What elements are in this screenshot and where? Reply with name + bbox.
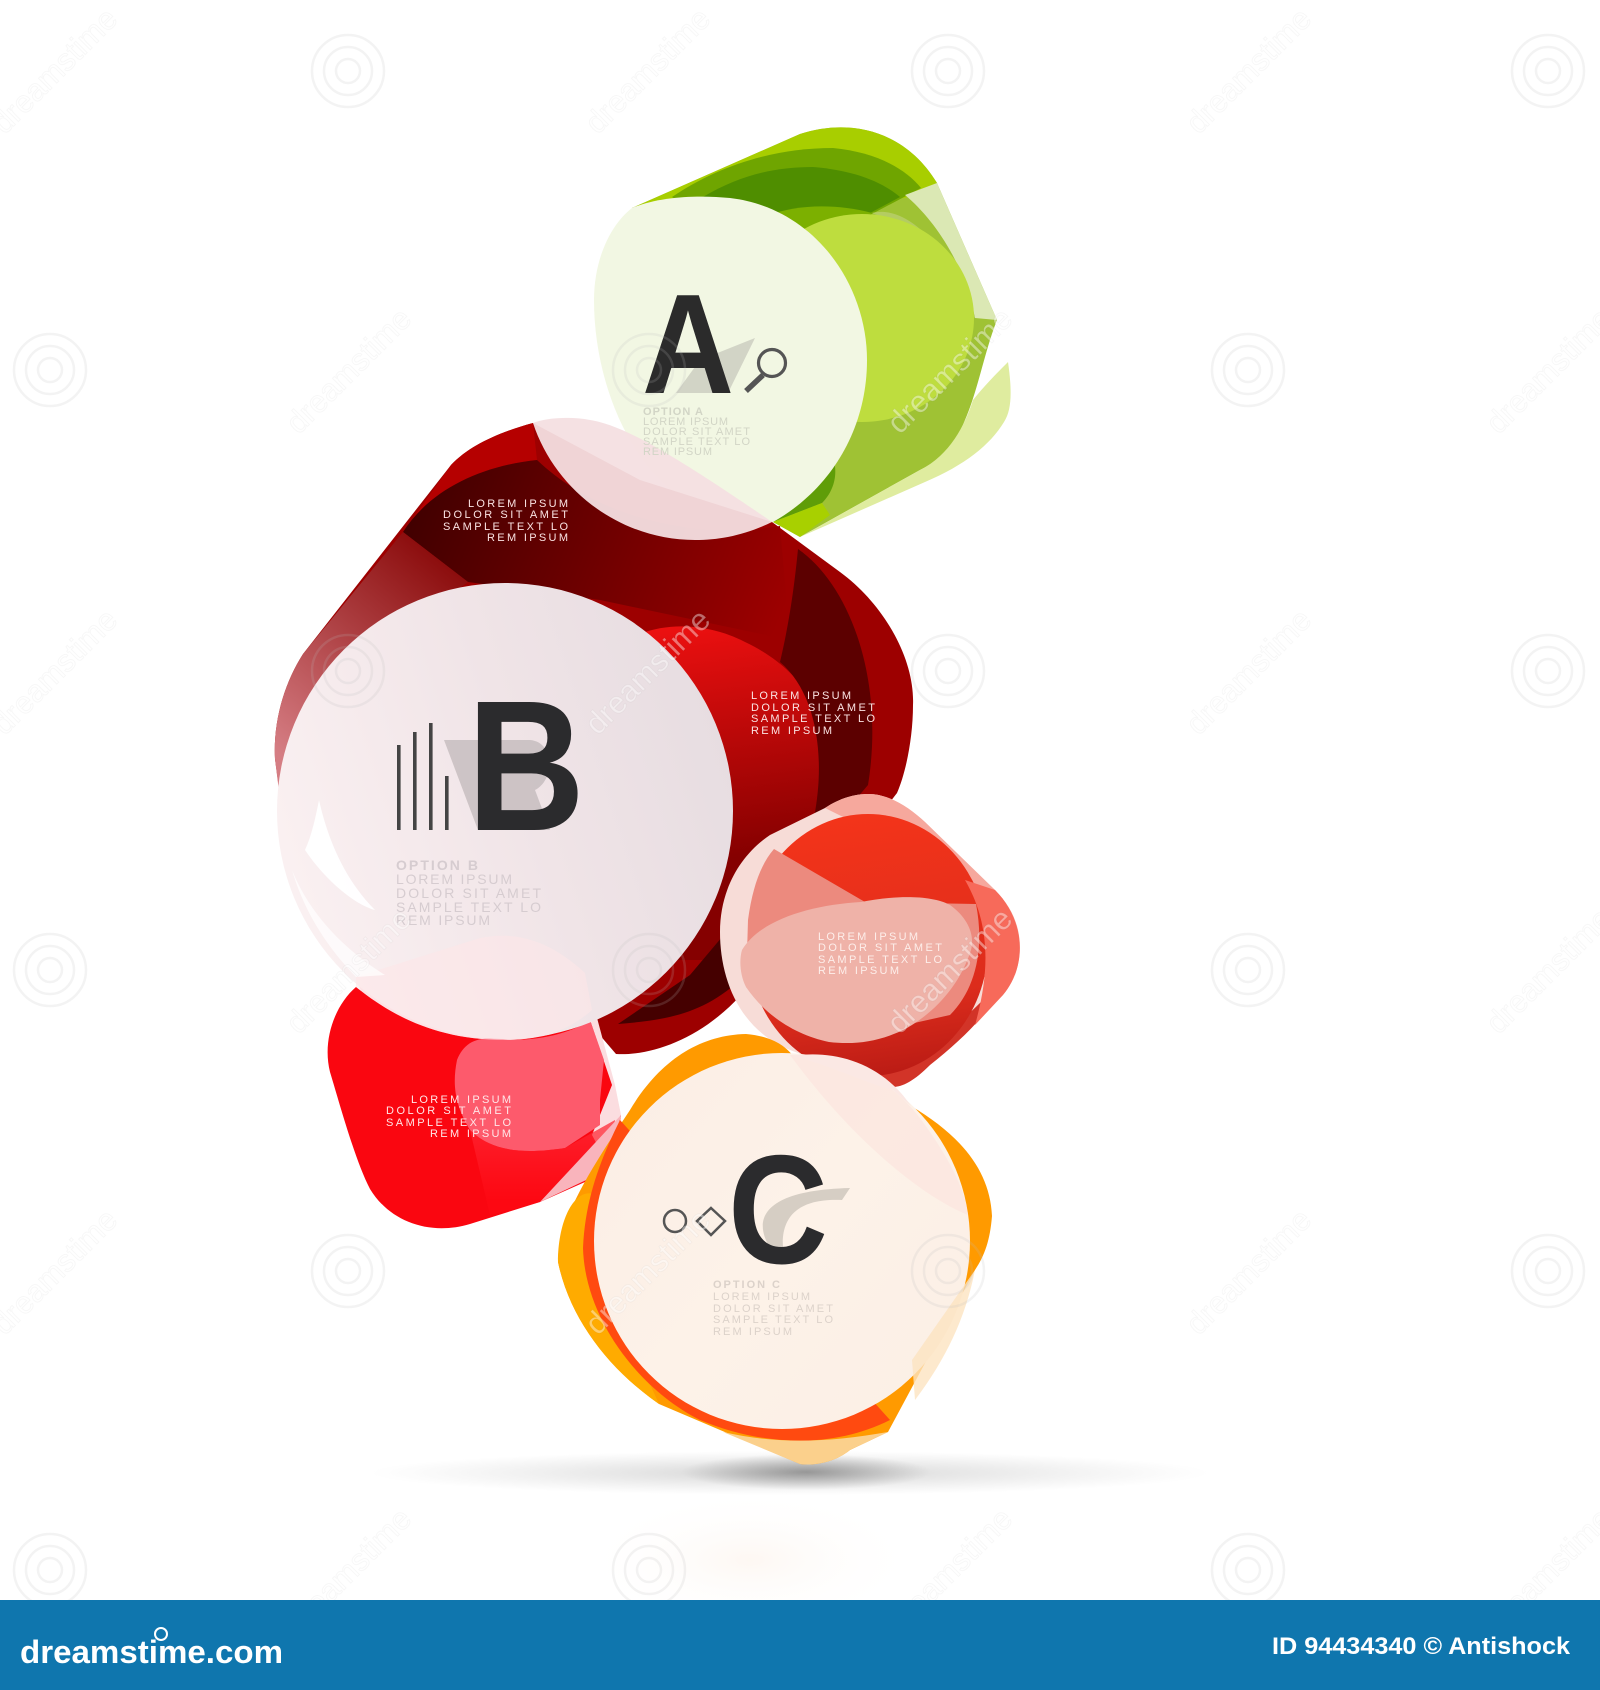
red body — [328, 987, 621, 1228]
panel: option A green shape — [632, 127, 1011, 537]
lower dark shadow band — [618, 808, 835, 1024]
text: option A: OPTION A — [643, 406, 703, 418]
watermark text: dreamstime — [1179, 602, 1318, 741]
left light strip — [275, 532, 468, 840]
pale diamond overlap on orange — [793, 1054, 911, 1106]
text: dark red right block: SAMPLE TEXT LO — [751, 713, 875, 725]
text: option A: REM IPSUM — [643, 446, 712, 458]
letter C — [728, 1123, 850, 1296]
pink circle — [455, 1020, 604, 1151]
rose wedge — [746, 849, 979, 1042]
text: diamond block: SAMPLE TEXT LO — [818, 954, 942, 966]
text: pink red block: DOLOR SIT AMET — [386, 1105, 511, 1117]
B ghost shadow — [444, 740, 550, 830]
text: pink red block: LOREM IPSUM — [411, 1094, 511, 1106]
text: dark red top block: LOREM IPSUM — [468, 498, 568, 510]
text: diamond block: DOLOR SIT AMET — [818, 942, 942, 954]
text: option C: LOREM IPSUM — [713, 1291, 810, 1303]
watermark text: dreamstime — [578, 602, 717, 741]
circle C — [594, 1053, 970, 1429]
watermark text: dreamstime — [880, 1501, 1019, 1640]
rose lower — [470, 1120, 615, 1215]
watermark text: dreamstime — [880, 901, 1019, 1040]
translucent overlays on circle B — [292, 800, 592, 1040]
salmon top right — [825, 794, 1020, 975]
text: option A: DOLOR SIT AMET — [643, 426, 750, 438]
pale lower left tint — [292, 870, 385, 977]
green translucent leaf — [800, 362, 1011, 537]
text: diamond block: REM IPSUM — [818, 965, 899, 977]
text: option C: DOLOR SIT AMET — [713, 1303, 833, 1315]
text: dark red right block — [751, 690, 875, 737]
pink tint upper right of C — [790, 1055, 968, 1215]
footer logo: dreamstime.com — [20, 1634, 283, 1670]
text: option C — [713, 1279, 833, 1338]
red base — [275, 423, 913, 1054]
watermark text: dreamstime — [279, 901, 418, 1040]
green body — [632, 127, 997, 537]
pink translucent overlay on top of red — [533, 418, 772, 540]
lime sliver — [773, 503, 830, 537]
green bump — [770, 206, 872, 250]
watermark text: dreamstime — [578, 1, 717, 140]
text: option C: OPTION C — [713, 1279, 780, 1291]
darker lower wedge — [773, 450, 835, 522]
green mid band — [872, 212, 975, 318]
C glyph: C — [728, 1123, 828, 1296]
red inner — [748, 814, 988, 1076]
text: option A — [643, 406, 750, 458]
circle B — [277, 583, 733, 1039]
dark gradient band — [403, 460, 790, 640]
C ghost shadow — [763, 1188, 850, 1262]
watermark text: dreamstime — [1179, 1202, 1318, 1341]
text: option A: SAMPLE TEXT LO — [643, 436, 750, 448]
panel: red B shape — [275, 423, 913, 1054]
watermark text: dreamstime — [279, 301, 418, 440]
circle A — [594, 197, 867, 527]
watermark text: dreamstime — [880, 301, 1019, 440]
text: pink red block — [386, 1094, 511, 1140]
panel: orange C shape — [558, 1034, 992, 1464]
panel: light red rounded diamond — [720, 794, 1020, 1087]
lower shape overlay — [356, 936, 592, 1040]
letter A — [642, 265, 755, 424]
text: dark red right block: DOLOR SIT AMET — [751, 702, 875, 714]
A glyph: A — [642, 265, 734, 424]
lime top band — [632, 127, 937, 208]
pink side — [965, 880, 1020, 1025]
pale right band — [905, 183, 997, 320]
dark green arc — [703, 167, 900, 240]
text: option B: OPTION B — [396, 857, 478, 873]
icon: circle and diamond — [664, 1208, 725, 1235]
text: pink red block: SAMPLE TEXT LO — [386, 1117, 511, 1129]
watermark text: dreamstime — [1179, 1, 1318, 140]
yellow orange left — [558, 1193, 659, 1404]
text: option C: REM IPSUM — [713, 1326, 792, 1338]
A ghost shadow — [676, 338, 755, 393]
text: option C: SAMPLE TEXT LO — [713, 1314, 833, 1326]
text: pink red block: REM IPSUM — [430, 1128, 511, 1140]
text: option A: LOREM IPSUM — [643, 416, 728, 428]
B glyph: B — [467, 663, 585, 870]
letter B — [444, 663, 585, 870]
text: option B: DOLOR SIT AMET — [396, 885, 541, 901]
text: dark red top block — [443, 498, 568, 544]
red orange crescent — [583, 1120, 890, 1441]
pale tip bottom right of C — [912, 1270, 975, 1400]
text: option B: REM IPSUM — [396, 912, 490, 928]
text: dark red right block: REM IPSUM — [751, 725, 832, 737]
text: option B — [396, 857, 541, 928]
pale top of shape — [356, 936, 621, 1202]
watermark text: dreamstime — [279, 1501, 418, 1640]
footer band — [0, 1600, 1600, 1690]
pale outer — [720, 794, 1020, 1087]
tan bottom — [723, 1432, 888, 1464]
icon: bars — [397, 723, 449, 830]
pale translucent tips — [540, 1115, 621, 1202]
icon: magnifier — [746, 350, 786, 391]
text: dark red top block: SAMPLE TEXT LO — [443, 521, 568, 533]
orange base — [558, 1034, 992, 1464]
mid green arc — [672, 148, 921, 240]
text: dark red top block: DOLOR SIT AMET — [443, 509, 568, 521]
text: diamond block — [818, 931, 942, 977]
panel: pink red rounded shape — [328, 936, 621, 1228]
floor shadow — [370, 1451, 1210, 1630]
pale inner blob — [740, 897, 972, 1043]
text: diamond block: LOREM IPSUM — [818, 931, 918, 943]
dark maroon crescent — [780, 549, 872, 865]
red top band — [403, 423, 537, 532]
text: dark red top block: REM IPSUM — [487, 532, 568, 544]
text: dark red right block: LOREM IPSUM — [751, 690, 851, 702]
red lower right — [845, 950, 1018, 1087]
text: option B: SAMPLE TEXT LO — [396, 899, 541, 915]
bright red circle — [600, 626, 832, 960]
watermark text: dreamstime — [578, 1202, 717, 1341]
lime circle — [750, 214, 974, 422]
white wedge left of B circle — [305, 800, 375, 910]
footer credit: ID 94434340 © Antishock — [1272, 1633, 1571, 1660]
text: option B: LOREM IPSUM — [396, 871, 512, 887]
